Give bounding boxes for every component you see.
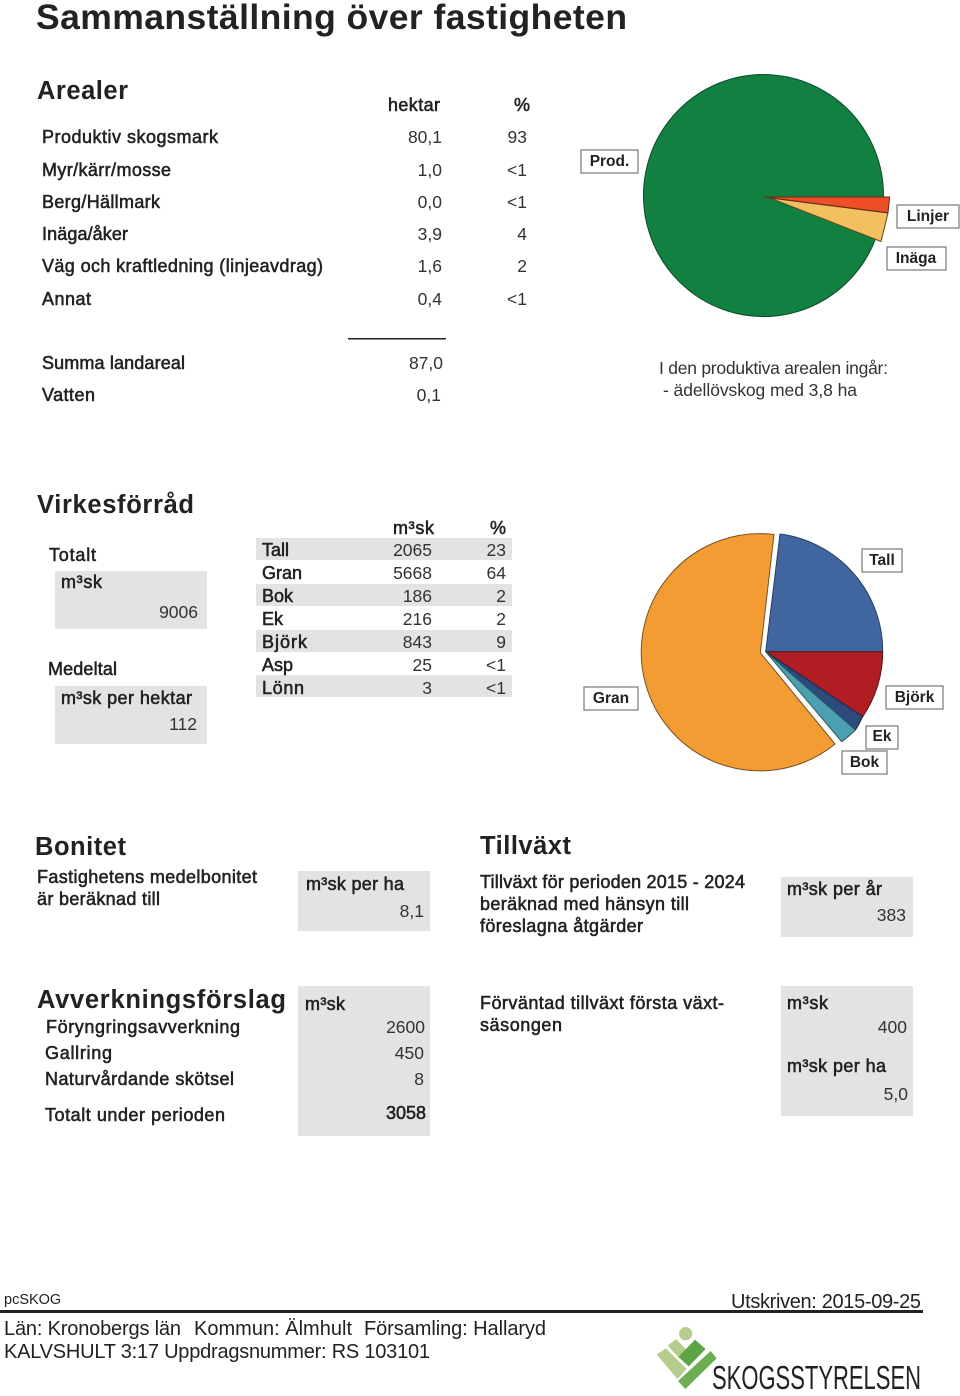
panel: bonitet xyxy=(35,833,430,931)
avverkning values: Gallring xyxy=(45,1043,112,1063)
avverkning values: 2600 xyxy=(386,1017,425,1037)
table: arealer: 93 xyxy=(508,127,527,147)
table: arealer: Vatten xyxy=(42,385,95,405)
location line: Län: Kronobergs län xyxy=(4,1318,181,1340)
förväntad description: Förväntad tillväxt första växt- xyxy=(480,993,724,1013)
avverkning values: 8 xyxy=(414,1069,424,1089)
label: Björk xyxy=(886,686,943,709)
bonitet description: Fastighetens medelbonitet xyxy=(37,867,257,887)
table: arealer: Väg och kraftledning (linjeavdrag) xyxy=(42,256,323,276)
table: tree species: Asp xyxy=(262,655,293,675)
table: arealer: Berg/Hällmark xyxy=(42,192,161,212)
avverkning values xyxy=(45,986,430,1136)
förväntad value box xyxy=(781,986,913,1116)
table: tree species: 186 xyxy=(403,586,432,606)
tillväxt value box xyxy=(781,877,913,937)
table: arealer: 0,4 xyxy=(418,289,442,309)
table: tree species: 2 xyxy=(496,586,506,606)
label: Ek: Ek xyxy=(873,728,892,745)
label: Tall: Tall xyxy=(869,552,895,569)
pie chart: areal xyxy=(644,75,890,317)
label: Bok xyxy=(842,751,887,774)
förväntad value box: 5,0 xyxy=(884,1084,908,1104)
table: tree species: <1 xyxy=(486,678,506,698)
table: arealer: <1 xyxy=(507,192,527,212)
table: tree species: 23 xyxy=(487,540,506,560)
table: arealer: Myr/kärr/mosse xyxy=(42,160,171,180)
totalt volume box: 9006 xyxy=(159,602,198,622)
location line: Församling: Hallaryd xyxy=(364,1318,546,1340)
table: tree species: 9 xyxy=(496,632,506,652)
medeltal box xyxy=(48,659,207,744)
label: Gran xyxy=(584,687,638,710)
heading: arealer: Arealer xyxy=(37,77,128,105)
table: arealer xyxy=(42,95,530,405)
panel: virkesförråd xyxy=(37,491,512,744)
table: arealer: 1,6 xyxy=(418,256,442,276)
label: Prod.: Prod. xyxy=(590,153,629,170)
heading: virkesförråd: Virkesförråd xyxy=(37,491,194,519)
table: tree species: Gran xyxy=(262,563,302,583)
table: arealer: 4 xyxy=(517,224,527,244)
label: Tall xyxy=(862,549,902,572)
table: tree species: Tall xyxy=(262,540,289,560)
förväntad description xyxy=(480,993,724,1035)
note: ädellövskog xyxy=(659,358,888,400)
footer xyxy=(0,1291,923,1396)
table: arealer: 2 xyxy=(517,256,527,276)
avverkning values: 3058 xyxy=(386,1103,426,1123)
program name: pcSKOG xyxy=(4,1292,61,1308)
table: arealer: 3,9 xyxy=(418,224,442,244)
table: tree species: 843 xyxy=(403,632,432,652)
note: ädellövskog: - ädellövskog med 3,8 ha xyxy=(663,380,857,400)
location line: Kommun: Älmhult xyxy=(194,1318,352,1340)
tillväxt description: föreslagna åtgärder xyxy=(480,916,643,936)
table: tree species: 2065 xyxy=(393,540,432,560)
tillväxt value box: m³sk per år xyxy=(787,879,882,899)
table: arealer: Summa landareal xyxy=(42,353,185,373)
location line xyxy=(4,1318,546,1340)
label: Bok: Bok xyxy=(850,754,880,771)
label: Gran: Gran xyxy=(593,690,629,707)
table: arealer: 87,0 xyxy=(409,353,443,373)
table: tree species: 3 xyxy=(422,678,432,698)
heading: avverkningsförslag: Avverkningsförslag xyxy=(37,986,286,1014)
label: Prod. xyxy=(581,150,638,173)
table: tree species: Lönn xyxy=(262,678,304,698)
förväntad description: säsongen xyxy=(480,1015,562,1035)
table: tree species: m³sk xyxy=(393,518,435,538)
label: Ek xyxy=(866,726,898,749)
bonitet description: är beräknad till xyxy=(37,889,160,909)
bonitet description xyxy=(37,867,257,909)
table: arealer: <1 xyxy=(507,289,527,309)
table: tree species: 64 xyxy=(487,563,506,583)
label: Linjer xyxy=(897,205,959,228)
medeltal box: m³sk per hektar xyxy=(61,688,192,708)
förväntad value box: m³sk xyxy=(787,993,829,1013)
label: Inäga xyxy=(887,247,946,270)
logo: skogsstyrelsen xyxy=(657,1327,921,1396)
label: Björk: Björk xyxy=(895,689,935,706)
table: tree species: % xyxy=(490,518,506,538)
medeltal box: 112 xyxy=(169,714,197,734)
table: tree species: Ek xyxy=(262,609,284,629)
table: tree species: 216 xyxy=(403,609,432,629)
totalt volume box xyxy=(49,545,207,629)
bonitet value box xyxy=(298,871,430,931)
förväntad value box: m³sk per ha xyxy=(787,1056,887,1076)
tillväxt description: Tillväxt för perioden 2015 - 2024 xyxy=(480,872,745,892)
avverkning values: m³sk xyxy=(305,994,346,1014)
table: tree species: 2 xyxy=(496,609,506,629)
table: tree species: <1 xyxy=(486,655,506,675)
table: arealer: 0,0 xyxy=(418,192,442,212)
totalt volume box: m³sk xyxy=(61,572,103,592)
avverkning values: Naturvårdande skötsel xyxy=(45,1069,234,1089)
tillväxt description: beräknad med hänsyn till xyxy=(480,894,689,914)
table: arealer: % xyxy=(514,95,530,115)
table: arealer: hektar xyxy=(388,95,440,115)
förväntad value box: 400 xyxy=(878,1017,907,1037)
property line: KALVSHULT 3:17 Uppdragsnummer: RS 103101 xyxy=(4,1341,430,1363)
table: arealer: Annat xyxy=(42,289,91,309)
label: Linjer: Linjer xyxy=(907,208,949,225)
table: arealer: 1,0 xyxy=(418,160,442,180)
table: arealer: <1 xyxy=(507,160,527,180)
panel: förväntad tillväxt xyxy=(480,986,913,1116)
table: tree species: 5668 xyxy=(393,563,432,583)
panel: arealer xyxy=(37,77,888,405)
table: tree species: Bok xyxy=(262,586,294,606)
pie chart: trädslag xyxy=(641,534,883,771)
tillväxt description xyxy=(480,872,745,936)
totalt volume box: Totalt xyxy=(49,545,96,565)
label: Inäga: Inäga xyxy=(896,250,937,267)
print date: Utskriven: 2015-09-25 xyxy=(731,1291,921,1313)
table: arealer: 80,1 xyxy=(408,127,442,147)
table: tree species: 25 xyxy=(413,655,432,675)
avverkning values: Föryngringsavverkning xyxy=(46,1017,240,1037)
table: arealer: Inäga/åker xyxy=(42,224,128,244)
table: arealer: 0,1 xyxy=(417,385,441,405)
medeltal box: Medeltal xyxy=(48,659,117,679)
table: arealer: Produktiv skogsmark xyxy=(42,127,219,147)
avverkning values: Totalt under perioden xyxy=(45,1105,225,1125)
note: ädellövskog: I den produktiva arealen ingår: xyxy=(659,358,888,378)
panel: tillväxt xyxy=(480,832,913,937)
bonitet value box: 8,1 xyxy=(400,901,424,921)
bonitet value box: m³sk per ha xyxy=(306,874,405,894)
heading: bonitet: Bonitet xyxy=(35,833,126,861)
tillväxt value box: 383 xyxy=(877,905,906,925)
heading: tillväxt: Tillväxt xyxy=(480,832,572,860)
avverkning values: 450 xyxy=(395,1043,424,1063)
panel: avverkningsförslag xyxy=(37,986,430,1136)
table: tree species: Björk xyxy=(262,632,308,652)
table: tree species xyxy=(256,518,512,698)
